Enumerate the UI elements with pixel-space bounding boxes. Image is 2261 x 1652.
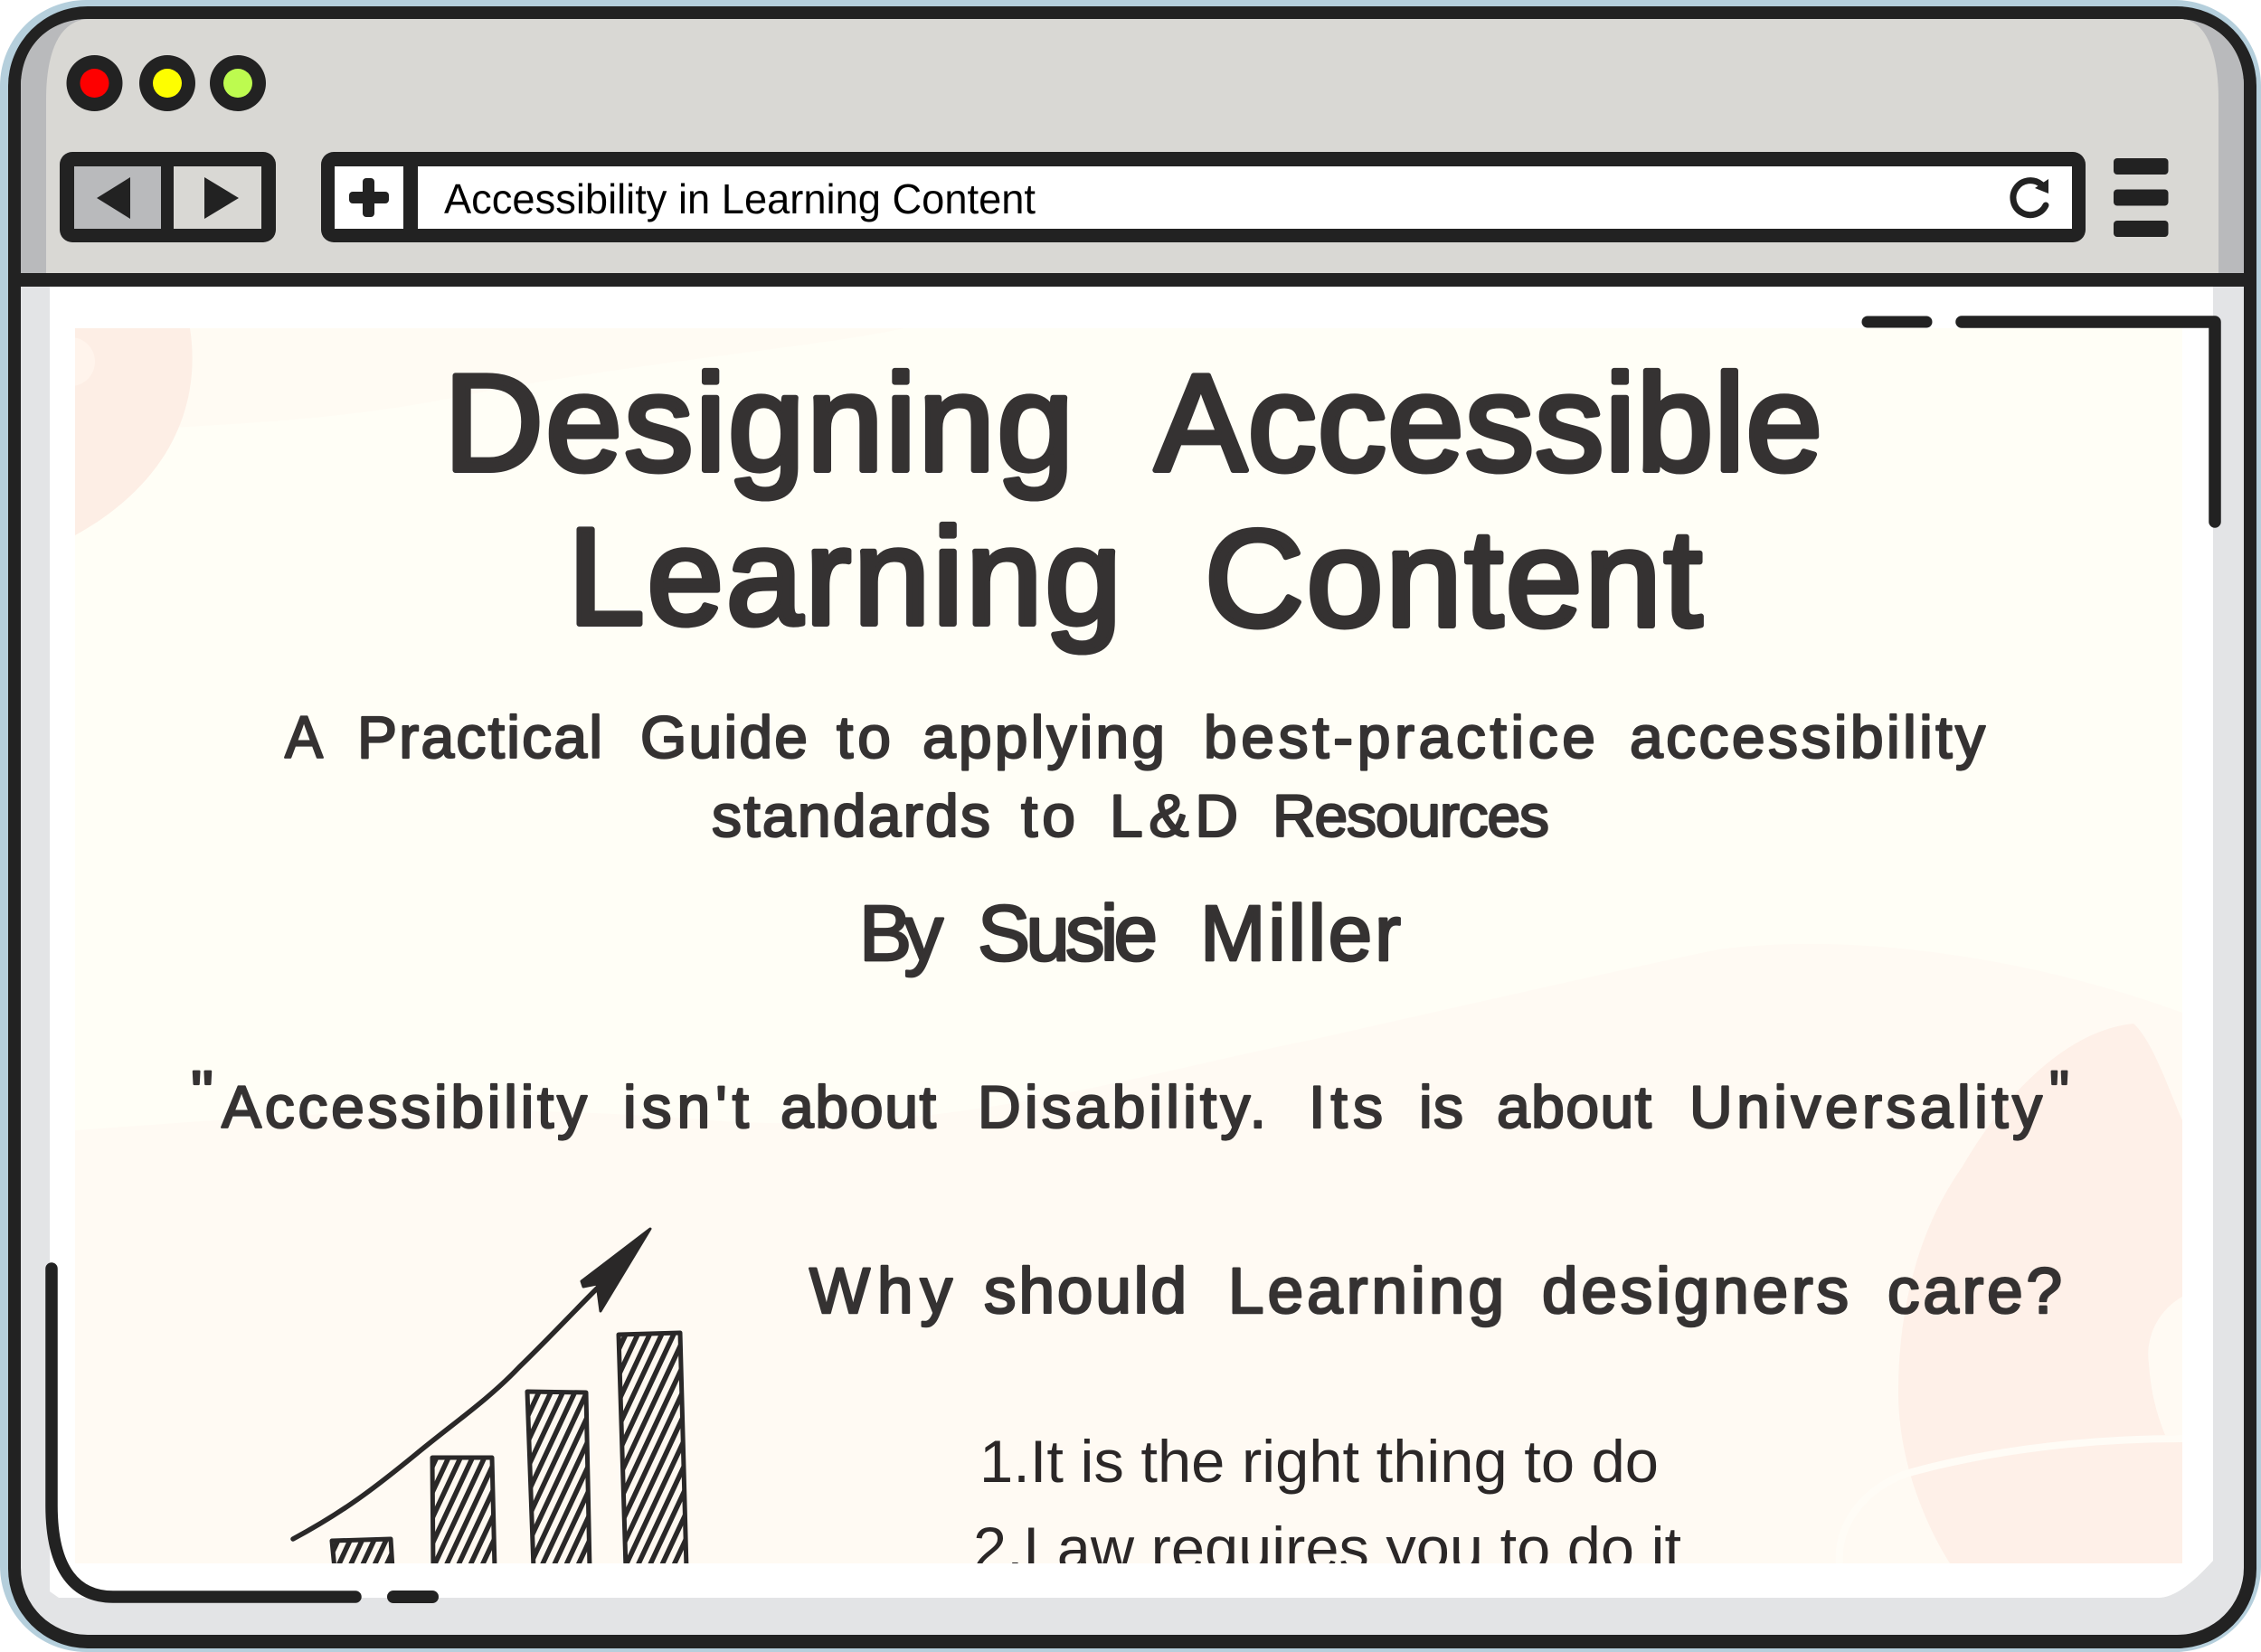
title: Learning (568, 500, 1121, 654)
back and forward buttons (60, 152, 276, 242)
heading: why should learning designers care: should (984, 1256, 1187, 1327)
heading: why should learning designers care: Learning (1228, 1256, 1504, 1327)
author byline: By (859, 890, 944, 977)
quote: is (1419, 1073, 1463, 1140)
quote: " (2049, 1058, 2069, 1125)
subtitle: Guide (640, 703, 808, 770)
subtitle: Practical (357, 703, 602, 770)
quote: isn't (623, 1073, 749, 1140)
subtitle: L&D (1110, 782, 1238, 849)
content background (46, 328, 2182, 1563)
page body (50, 287, 2213, 1598)
quote: " (191, 1058, 213, 1125)
address bar: Accessibility in Learning Content (444, 175, 1036, 222)
heading: why should learning designers care: designers (1542, 1256, 1849, 1327)
title: Designing (444, 346, 1074, 500)
subtitle (285, 703, 1985, 849)
bar chart with rising arrow (293, 1229, 686, 1569)
author byline: Susie (978, 890, 1158, 977)
heading: why should learning designers care: Why (809, 1256, 953, 1327)
icon: hamburger menu (2114, 158, 2169, 237)
reasons list: 1.It is the right thing to do (979, 1428, 1659, 1495)
quote: Universality (1689, 1073, 2042, 1140)
author byline (859, 890, 1401, 977)
quote: Disability. (978, 1073, 1266, 1140)
quote: Its (1309, 1073, 1383, 1140)
reasons list: 2.Law requires you to do it (973, 1515, 1681, 1581)
subtitle: applying (922, 703, 1165, 770)
title (444, 346, 1822, 656)
author byline: Miller (1200, 890, 1401, 977)
quote: about (780, 1073, 936, 1140)
title bar (8, 19, 2256, 287)
reasons list (977, 1439, 1680, 1563)
subtitle: to (837, 703, 891, 770)
address bar (321, 152, 2086, 242)
window control buttons (67, 55, 266, 111)
window corner accent lines (52, 322, 2215, 1597)
subtitle: best-practice (1204, 703, 1595, 770)
heading: why should learning designers care (809, 1256, 2062, 1327)
quote: about (1497, 1073, 1651, 1140)
subtitle: accessibility (1630, 703, 1985, 770)
quote (191, 1058, 2069, 1140)
heading: why should learning designers care: care? (1887, 1256, 2062, 1327)
subtitle: A (285, 703, 323, 770)
quote: Accessibility (222, 1073, 587, 1140)
title: Accessible (1155, 346, 1822, 500)
subtitle: Resources (1272, 782, 1549, 849)
subtitle: to (1021, 782, 1075, 849)
title: Content (1205, 502, 1702, 656)
subtitle: standards (712, 782, 990, 849)
